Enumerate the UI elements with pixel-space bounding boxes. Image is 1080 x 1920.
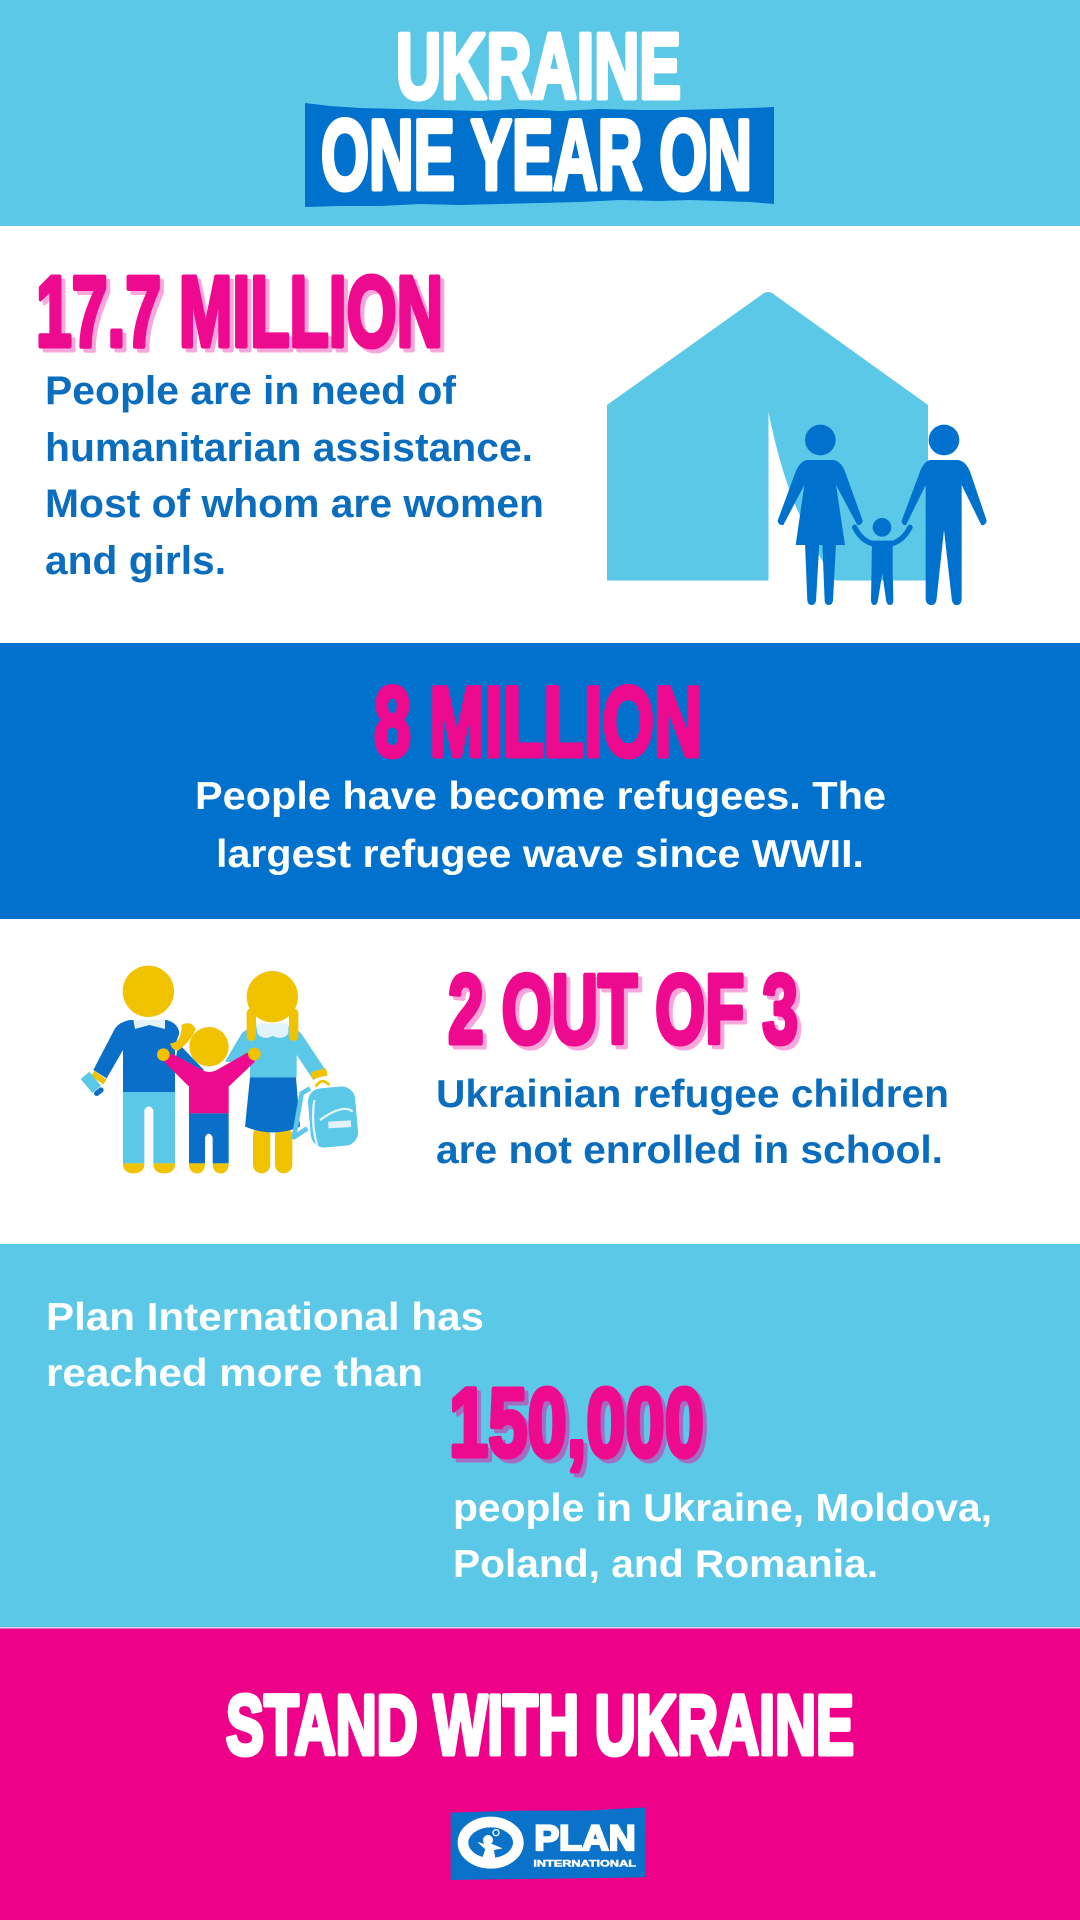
icon: boy bbox=[85, 966, 204, 1173]
logo: Plan International: INTERNATIONAL bbox=[533, 1859, 636, 1869]
icon: child bbox=[855, 518, 910, 605]
text: humanitarian assistance: humanitarian assistance. bbox=[45, 426, 533, 470]
logo: Plan International: PLAN bbox=[534, 1819, 636, 1858]
text: countries bbox=[453, 1487, 992, 1586]
text: Plan International has reached: reached more than bbox=[46, 1352, 423, 1395]
stat: 8 million: 8 MILLION bbox=[374, 666, 702, 777]
icon: three schoolchildren bbox=[85, 966, 359, 1173]
text: humanitarian assistance bbox=[45, 369, 544, 583]
torn blue band bbox=[305, 103, 774, 207]
icon: tent house with family bbox=[607, 292, 987, 605]
panel: 2 out of 3 bbox=[0, 919, 1080, 1244]
text: humanitarian assistance: People are in need of bbox=[45, 369, 457, 413]
panel: 8 million bbox=[0, 643, 1080, 919]
title: One Year On: ONE YEAR ON bbox=[321, 99, 752, 210]
panel: 17.7 million bbox=[0, 226, 1080, 643]
text: countries: people in Ukraine, Moldova, bbox=[453, 1487, 992, 1530]
icon: little girl bbox=[157, 1023, 261, 1173]
text: humanitarian assistance: and girls. bbox=[45, 539, 226, 583]
panel: title header bbox=[0, 0, 1080, 226]
stat: 2 out of 3: 2 OUT OF 3 bbox=[448, 954, 798, 1064]
text: humanitarian assistance: Most of whom are women bbox=[45, 482, 544, 526]
text: Plan International has reached bbox=[46, 1296, 484, 1395]
text: school enrolment: Ukrainian refugee children bbox=[436, 1073, 949, 1116]
text: refugees bbox=[195, 775, 886, 876]
stat: 150,000: 150,000 bbox=[449, 1368, 704, 1477]
icon: big girl with backpack bbox=[225, 971, 359, 1173]
text: school enrolment: are not enrolled in school. bbox=[436, 1129, 943, 1172]
title: Ukraine: UKRAINE bbox=[396, 14, 681, 118]
panel: 150,000 reached bbox=[0, 1244, 1080, 1628]
panel: call to action footer bbox=[0, 1627, 1080, 1920]
text: refugees: People have become refugees. The bbox=[195, 775, 886, 818]
icon: woman bbox=[778, 425, 863, 605]
text: refugees: largest refugee wave since WWII. bbox=[216, 833, 864, 876]
logo: Plan International bbox=[451, 1807, 646, 1880]
stat: 17.7 million: 17.7 MILLION bbox=[36, 256, 443, 368]
icon: man bbox=[902, 425, 987, 605]
text: Plan International has reached: Plan International has bbox=[46, 1296, 484, 1339]
text: school enrolment bbox=[436, 1073, 949, 1172]
text: countries: Poland, and Romania. bbox=[453, 1543, 878, 1586]
